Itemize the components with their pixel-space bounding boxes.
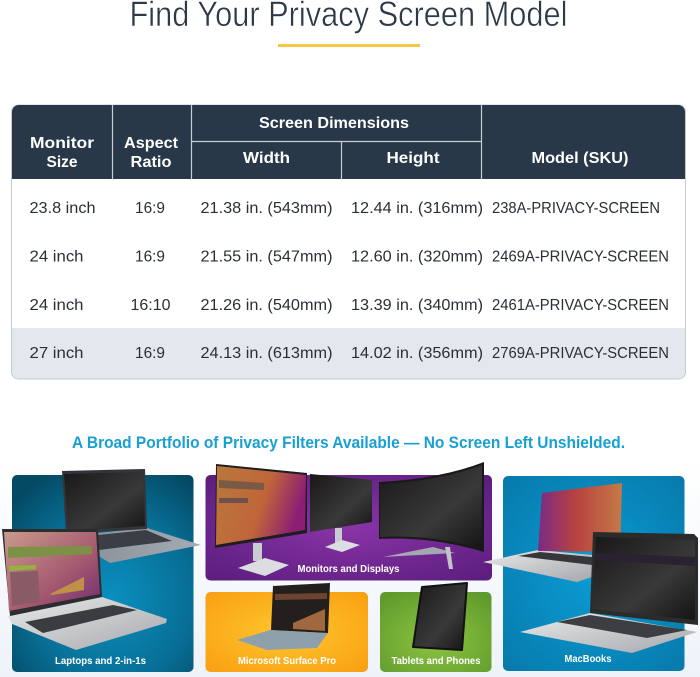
table header: Monitor <box>30 135 94 152</box>
lower background <box>0 455 700 677</box>
panel: macbooks <box>483 476 698 671</box>
row: 23.8 inch: 23.8 inch <box>30 200 96 217</box>
row: 27 inch: 2769A-PRIVACY-SCREEN <box>492 345 669 362</box>
row: 24 inch 16:10: 13.39 in. (340mm) <box>351 297 483 314</box>
table header: Height <box>386 150 440 167</box>
panel: tablets <box>380 583 492 672</box>
label: monitors: Monitors and Displays <box>298 563 400 575</box>
icon: front macbook with privacy filter <box>520 532 698 653</box>
row: 24 inch 16:10: 21.26 in. (540mm) <box>200 297 332 314</box>
label: tablets: Tablets and Phones <box>392 655 481 667</box>
table header <box>12 105 685 179</box>
row: 27 inch: 24.13 in. (613mm) <box>200 345 332 362</box>
label: laptops: Laptops and 2-in-1s <box>55 655 146 667</box>
highlighted row background <box>12 328 685 378</box>
icon: curved monitor with privacy filter <box>379 462 484 569</box>
panel: monitors <box>206 462 492 580</box>
row: 24 inch 16:9: 2469A-PRIVACY-SCREEN <box>492 248 669 266</box>
table header: Width <box>243 150 290 167</box>
icon: front laptop with open screen <box>2 529 167 650</box>
icon: surface laptop <box>237 583 330 650</box>
table header: Screen Dimensions <box>259 115 409 132</box>
row: 23.8 inch <box>30 200 660 217</box>
table header: Ratio <box>130 154 172 171</box>
table header: Size <box>46 154 78 171</box>
panel: surface <box>206 583 368 672</box>
table header: Aspect <box>124 135 179 152</box>
row: 24 inch 16:10: 16:10 <box>130 297 171 314</box>
row: 24 inch 16:10: 24 inch <box>30 297 84 314</box>
row: 24 inch 16:9: 21.55 in. (547mm) <box>200 248 332 266</box>
row: 27 inch: 14.02 in. (356mm) <box>351 345 483 362</box>
title underline <box>278 44 420 47</box>
row: 23.8 inch: 21.38 in. (543mm) <box>200 200 332 217</box>
row: 27 inch: 27 inch <box>30 345 84 362</box>
row: 23.8 inch: 12.44 in. (316mm) <box>351 200 483 217</box>
row: 24 inch 16:9: 16:9 <box>135 248 165 266</box>
row: 23.8 inch: 238A-PRIVACY-SCREEN <box>492 200 660 217</box>
section heading: A Broad Portfolio of Privacy Filters Available — No Screen Left Unshielded. <box>72 433 625 452</box>
icon: left monitor with visible screen <box>215 464 307 576</box>
icon: rear macbook with visible screen <box>483 483 622 582</box>
row: 27 inch <box>30 345 669 362</box>
icon: rear laptop with privacy filter <box>62 469 201 563</box>
table header: Model (SKU) <box>532 150 628 167</box>
row: 24 inch 16:10: 2461A-PRIVACY-SCREEN <box>492 297 669 314</box>
row: 24 inch 16:9: 12.60 in. (320mm) <box>351 248 483 266</box>
panel: laptops <box>2 469 201 672</box>
table body <box>12 105 686 379</box>
row: 24 inch 16:9 <box>30 248 669 266</box>
label: macbooks: MacBooks <box>564 653 612 665</box>
icon: centre monitor with privacy filter <box>310 474 372 552</box>
row: 23.8 inch: 16:9 <box>135 200 165 217</box>
row: 24 inch 16:10 <box>30 297 669 314</box>
row: 27 inch: 16:9 <box>135 345 165 362</box>
icon: tablet with privacy filter <box>413 583 467 650</box>
label: surface: Microsoft Surface Pro <box>238 655 336 667</box>
table <box>12 105 686 379</box>
row: 24 inch 16:9: 24 inch <box>30 248 84 266</box>
